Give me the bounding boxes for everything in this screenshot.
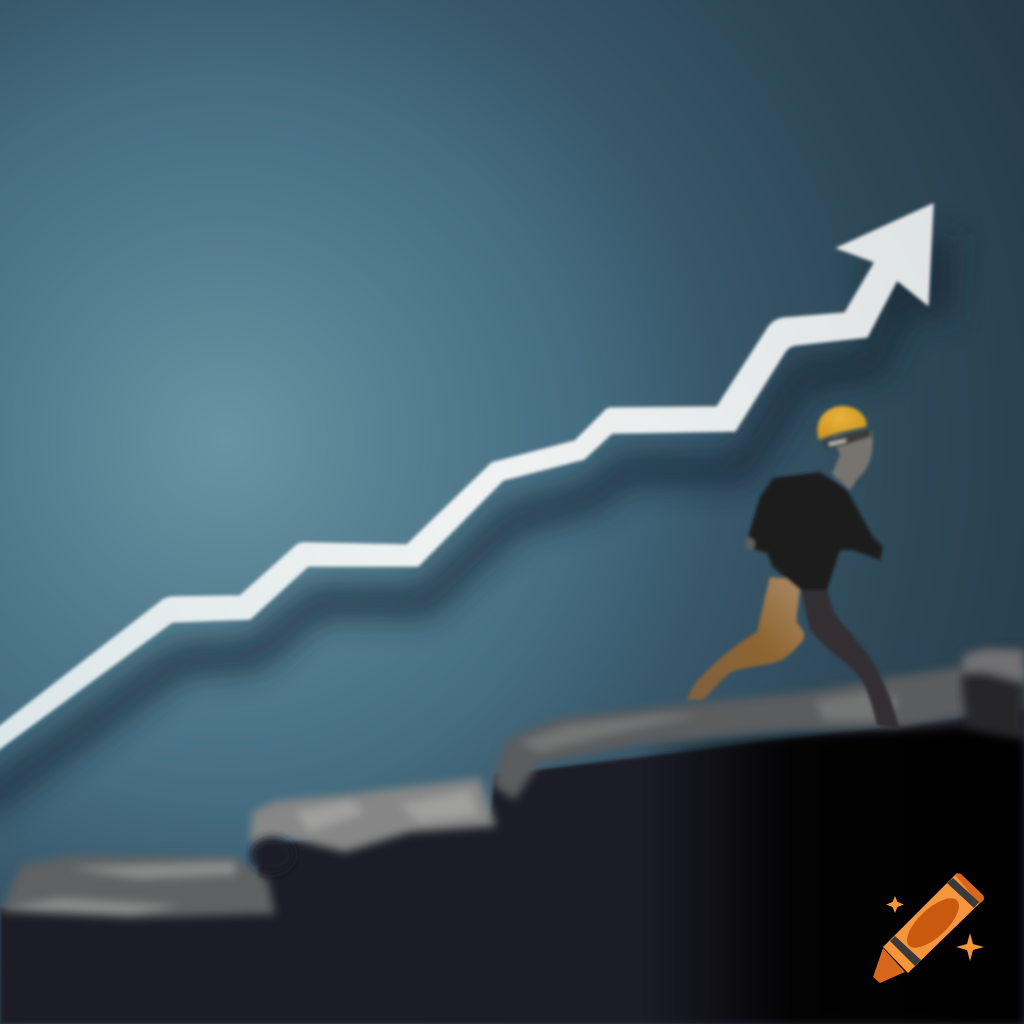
crayon body [883,873,984,973]
rock: right block [962,647,1024,745]
left hand [745,538,755,550]
rock: shaded notch between steps [250,837,294,873]
climber [687,406,900,730]
goggles [822,430,872,449]
crayon tip [873,948,905,983]
rock: dark body of all steps [0,710,1024,1024]
rock: lowest step top [0,856,275,918]
rock steps [0,647,1024,1024]
rock: middle step top [250,778,496,852]
crayon bands [890,878,979,966]
dark shaded cliff [640,728,1024,1024]
front leg [800,585,900,730]
arrow shadow [0,235,955,805]
crayon cap [955,873,984,904]
rising arrow [0,204,933,752]
head [832,432,873,490]
sparkle large [956,933,984,961]
rock: upper step top [492,665,1024,800]
back leg [687,577,804,700]
sparkle small [886,896,904,913]
goggle glint [828,439,846,446]
torso [747,472,883,590]
icon: crayon logo [873,873,984,983]
helmet [817,406,867,440]
crayon oval [899,890,967,956]
